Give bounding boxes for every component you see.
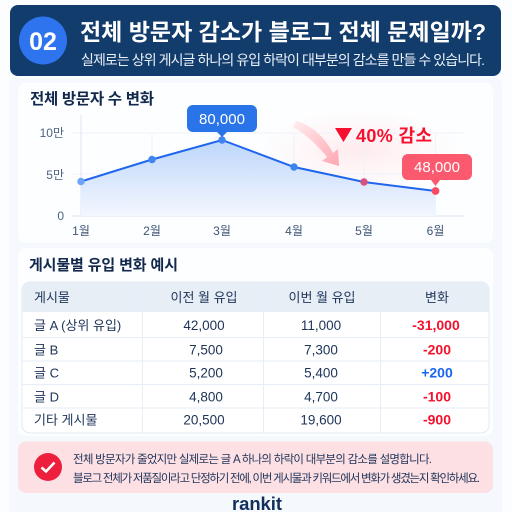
arrow: decline [293, 121, 339, 166]
row: 글 A: -31,000 [412, 317, 460, 333]
chart heading: 전체 방문자 수 변화 [30, 90, 154, 108]
row: 글 D [34, 388, 451, 404]
row: 글 B: 7,300 [304, 342, 338, 358]
panel: post table [18, 248, 493, 436]
y axis labels: 0 [57, 209, 64, 223]
callout: conclusion [18, 442, 493, 493]
row: 기타 게시물: 기타 게시물 [34, 412, 97, 428]
grid [72, 133, 464, 216]
x axis labels: 5월 [355, 224, 373, 238]
conclusion text: 전체 방문자가 줄었지만 실제로는 글 A 하나의 하락이 대부분의 감소를 설명합니다. [73, 452, 432, 466]
trend line [81, 140, 436, 191]
conclusion text: 블로그 전체가 저품질이라고 단정하기 전에, 이번 게시물과 키워드에서 변화가 생겼는지 확인하세요. [73, 471, 480, 485]
row: 글 D: 4,800 [189, 390, 223, 404]
icon: check mark [34, 453, 62, 481]
area under the line [81, 140, 436, 216]
x axis labels: 2월 [143, 224, 161, 238]
table header row: 이번 월 유입 [288, 290, 356, 305]
subtitle: 실제로는 상위 게시글 하나의 유입 하락이 대부분의 감소를 만들 수 있습니다. [81, 52, 485, 68]
x axis labels: 6월 [427, 224, 444, 238]
table heading: 게시물별 유입 변화 예시 [29, 257, 178, 274]
row: 글 C: 5,200 [189, 366, 223, 380]
x axis labels [72, 224, 444, 238]
x axis labels: 1월 [72, 224, 90, 238]
row: 글 A: 11,000 [301, 318, 341, 333]
callout: 48,000 [402, 154, 472, 186]
y axis labels: 5만 [46, 168, 64, 182]
row: 글 A [34, 317, 460, 333]
number badge: 02 [29, 28, 57, 56]
callout: 40% decrease: 40% 감소 [356, 126, 432, 146]
title: 전체 방문자 감소가 블로그 전체 문제일까? [80, 19, 486, 45]
row: 기타 게시물: 20,500 [183, 412, 225, 428]
conclusion text [73, 452, 480, 485]
row: 글 C: 5,400 [304, 366, 338, 380]
number badge [19, 16, 67, 64]
data points [77, 136, 439, 195]
row: 글 C [34, 364, 453, 380]
callout: 48,000: 48,000 [414, 159, 460, 176]
y axis labels: 10만 [40, 126, 64, 140]
table header row: 변화 [425, 290, 449, 305]
row: 글 A: 42,000 [183, 318, 225, 333]
table [22, 282, 489, 433]
x axis labels: 4월 [285, 224, 303, 238]
table header row: 이전 월 유입 [170, 290, 238, 305]
y axis labels [40, 126, 64, 223]
row: 글 B: -200 [423, 342, 451, 358]
row: 글 D: -100 [423, 388, 451, 404]
row: 글 C: 글 C [34, 366, 59, 380]
table header row [22, 282, 489, 312]
row: 글 B: 글 B [34, 342, 58, 358]
row: 글 D: 글 D [34, 390, 59, 404]
row: 글 B: 7,500 [189, 342, 223, 358]
red glow [260, 108, 460, 192]
row: 글 A: 글 A (상위 유입) [34, 318, 121, 333]
callout: 80,000: 80,000 [199, 111, 245, 128]
table header row: 게시물 [34, 290, 70, 305]
row: 기타 게시물 [34, 412, 451, 428]
panel: visitor line chart [18, 83, 493, 243]
callout: 80,000 [187, 105, 257, 137]
row: 글 B [34, 342, 451, 358]
x axis labels: 3월 [213, 224, 231, 238]
row: 글 D: 4,700 [304, 390, 338, 404]
row: 글 C: +200 [421, 364, 453, 380]
row: 기타 게시물: 19,600 [300, 412, 342, 428]
row: 기타 게시물: -900 [423, 412, 451, 428]
header banner [10, 5, 501, 76]
